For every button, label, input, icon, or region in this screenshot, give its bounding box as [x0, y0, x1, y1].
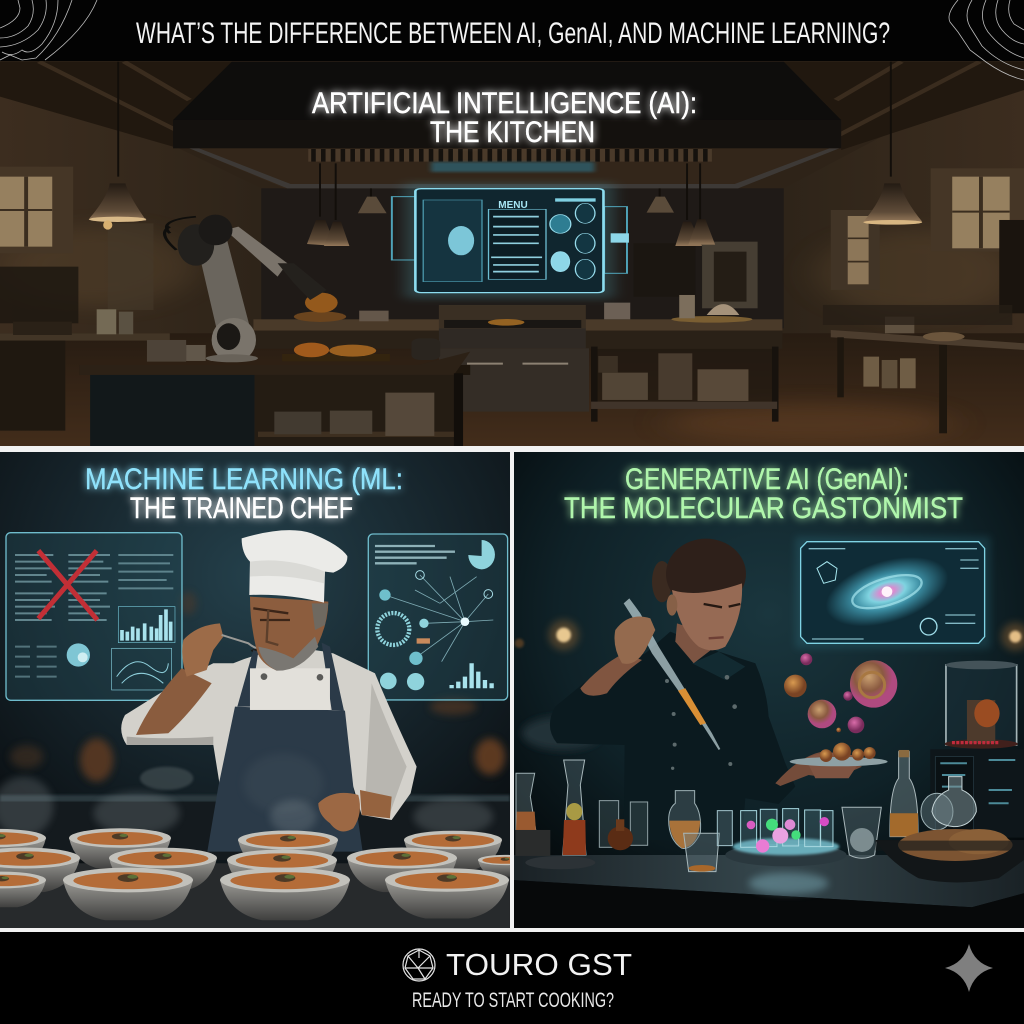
header band — [0, 0, 1024, 80]
heading: machine learning: MACHINE LEARNING (ML: — [85, 463, 403, 496]
panel: artificial intelligence kitchen — [0, 60, 1024, 450]
oven range — [439, 305, 586, 328]
jacket — [550, 632, 795, 840]
floating spheres — [784, 653, 897, 733]
steam — [0, 777, 493, 837]
bokeh lights — [515, 620, 1024, 750]
forearm raised — [136, 668, 212, 735]
forearms — [580, 653, 642, 696]
windows — [0, 167, 73, 226]
bread bowl — [875, 829, 1024, 882]
coat torso and sleeves — [121, 649, 417, 820]
apparatus and blender — [930, 661, 1024, 838]
tagline: READY TO START COOKING? — [412, 989, 614, 1012]
plate — [805, 752, 862, 778]
stock pots — [602, 373, 648, 400]
chef hat — [242, 530, 347, 603]
counter items — [294, 311, 346, 322]
hand with spoon — [182, 623, 223, 677]
hanging pendant lamps — [89, 62, 922, 246]
hud panel: left data sheet — [6, 533, 182, 700]
chef woman figure — [550, 539, 888, 840]
heading: artificial intelligence: THE KITCHEN — [430, 116, 595, 149]
table surface — [512, 855, 1024, 930]
hud panel: right network — [368, 534, 508, 700]
shelves and jars — [634, 243, 696, 297]
contour decoration: top left — [0, 0, 97, 60]
left side counter — [0, 333, 170, 341]
gastronomist scene illustration — [512, 537, 1024, 930]
soup bowls — [0, 828, 532, 920]
back counter — [253, 319, 782, 331]
panel: generative ai molecular gastronomist — [512, 452, 1024, 930]
black footer bar — [0, 932, 1024, 1024]
right side table — [831, 330, 1024, 350]
hair and bun — [652, 561, 672, 602]
pipette — [624, 598, 720, 750]
chef scene illustration — [0, 530, 510, 930]
wall glow — [8, 228, 193, 304]
blurred kitchen background — [0, 592, 510, 860]
table — [0, 863, 510, 930]
heading: machine learning: THE TRAINED CHEF — [130, 492, 353, 525]
neck — [675, 623, 719, 663]
heading: artificial intelligence — [312, 87, 697, 149]
robot arm — [165, 215, 327, 362]
glowing molecular tray — [725, 809, 847, 866]
icon: touro gst globe logo — [403, 949, 435, 981]
panel: machine learning trained chef — [0, 452, 532, 930]
chef figure — [121, 530, 417, 852]
front island — [80, 338, 470, 448]
black title bar — [0, 0, 1024, 61]
lower hand — [360, 790, 392, 818]
icon: four point sparkle — [945, 944, 993, 992]
hologram galaxy panel — [795, 537, 990, 648]
brand name: TOURO GST — [446, 947, 632, 982]
heading: machine learning — [85, 463, 403, 525]
contour decoration: top right — [949, 0, 1024, 80]
heading: generative ai — [564, 463, 963, 525]
panel background — [514, 452, 1024, 928]
apron — [207, 707, 363, 852]
footer band — [0, 932, 1024, 1024]
kitchen scene illustration — [0, 60, 1024, 450]
menu label: MENU — [498, 200, 528, 211]
extractor hood — [173, 62, 841, 120]
glassware — [515, 750, 976, 872]
heading: generative ai: THE MOLECULAR GASTONMIST — [564, 492, 963, 525]
heading: artificial intelligence: ARTIFICIAL INTELLIGENCE (AI): — [312, 87, 697, 120]
red cross — [38, 551, 97, 620]
heading: generative ai: GENERATIVE AI (GenAI): — [625, 463, 909, 496]
neck and head — [250, 597, 328, 671]
hand gripping — [614, 617, 655, 664]
holographic menu screen — [392, 183, 629, 298]
panel background — [0, 452, 510, 928]
